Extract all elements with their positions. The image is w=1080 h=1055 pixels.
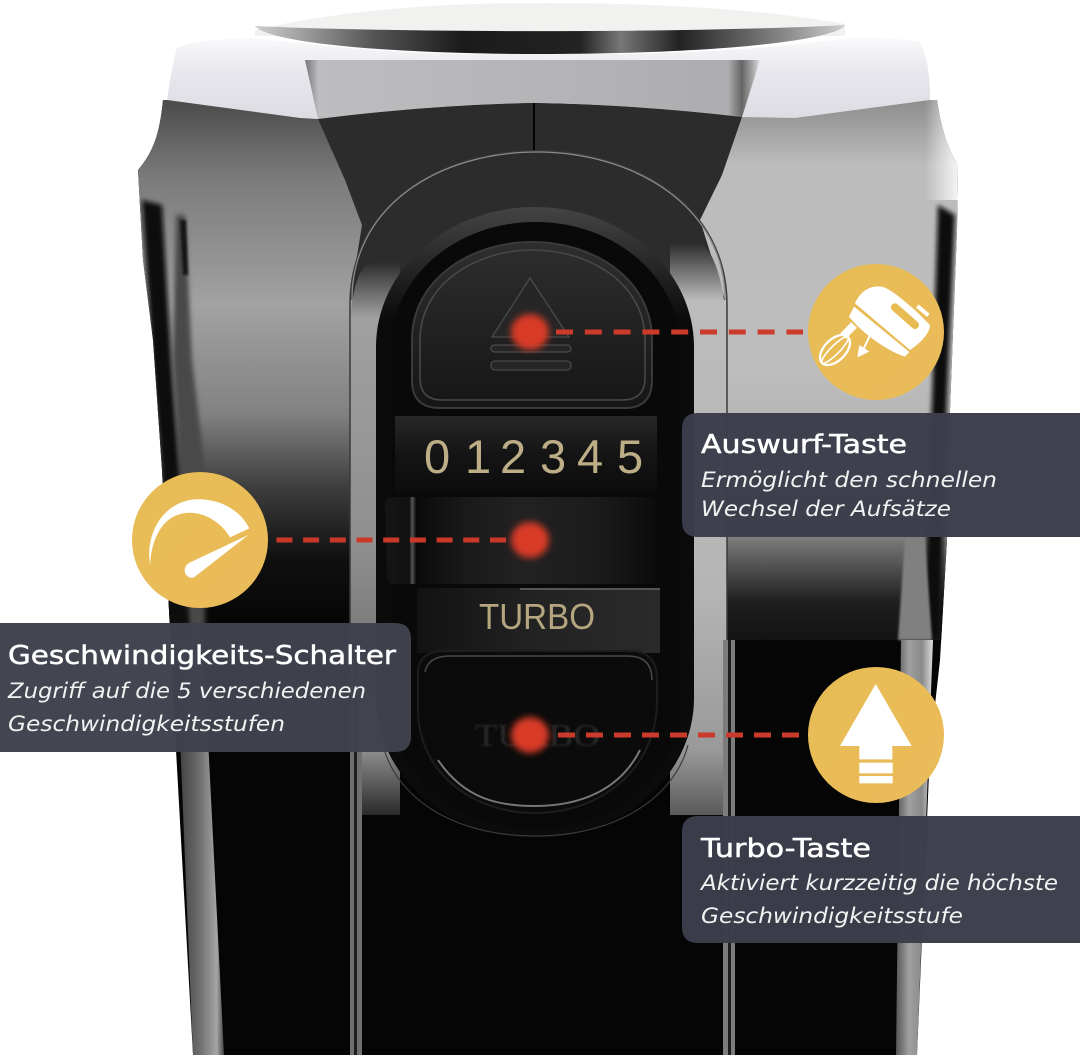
description xyxy=(7,679,366,736)
description: Geschwindigkeitsstufen xyxy=(8,712,285,736)
description: Zugriff auf die 5 verschiedenen xyxy=(7,679,366,703)
description: Geschwindigkeitsstufe xyxy=(701,904,963,928)
speed numbers: 0 xyxy=(424,430,450,483)
turbo band xyxy=(417,588,660,653)
speed numbers: 4 xyxy=(577,430,603,483)
panel: Turbo-Taste xyxy=(682,816,1080,943)
heading: Turbo-Taste xyxy=(700,834,871,864)
speed numbers xyxy=(424,430,643,483)
mixer lid xyxy=(255,3,845,54)
control oval xyxy=(350,151,735,1055)
eject symbol xyxy=(491,278,571,370)
turbo label: TURBO xyxy=(479,596,595,637)
chrome strips xyxy=(350,243,735,1055)
dashed line: eject xyxy=(556,330,803,334)
speed scale band xyxy=(395,416,657,494)
description: Ermöglicht den schnellen xyxy=(701,468,997,492)
outer oval outline xyxy=(350,151,727,640)
speed numbers: 5 xyxy=(617,430,643,483)
panel: Geschwindigkeits-Schalter xyxy=(0,623,411,752)
chrome collar xyxy=(167,38,930,119)
marker: eject xyxy=(511,314,549,350)
description: Wechsel der Aufsätze xyxy=(701,497,951,521)
heading: Auswurf-Taste xyxy=(701,430,907,460)
marker: speed xyxy=(511,522,549,558)
turbo button xyxy=(418,651,657,813)
black oval xyxy=(376,207,694,838)
dashed line: speed xyxy=(276,538,506,542)
speed numbers: 1 xyxy=(465,430,491,483)
heading: Geschwindigkeits-Schalter xyxy=(8,641,396,671)
panel: Auswurf-Taste xyxy=(682,413,1080,537)
mixer body xyxy=(130,3,970,1055)
front dark panel xyxy=(318,103,742,300)
speed numbers: 2 xyxy=(500,430,526,483)
eject button xyxy=(412,242,652,408)
description xyxy=(699,871,1058,928)
description xyxy=(701,468,997,521)
icon: turbo arrow xyxy=(808,667,944,803)
embossed button text: TURBO xyxy=(475,717,600,753)
speed switch xyxy=(385,497,657,584)
dashed line: turbo xyxy=(558,732,805,738)
icon: mixer xyxy=(808,264,944,400)
icon: speedometer xyxy=(132,472,268,608)
speed numbers: 3 xyxy=(540,430,566,483)
marker: turbo xyxy=(511,717,549,753)
description: Aktiviert kurzzeitig die höchste xyxy=(699,871,1058,895)
body shell xyxy=(130,100,970,1055)
